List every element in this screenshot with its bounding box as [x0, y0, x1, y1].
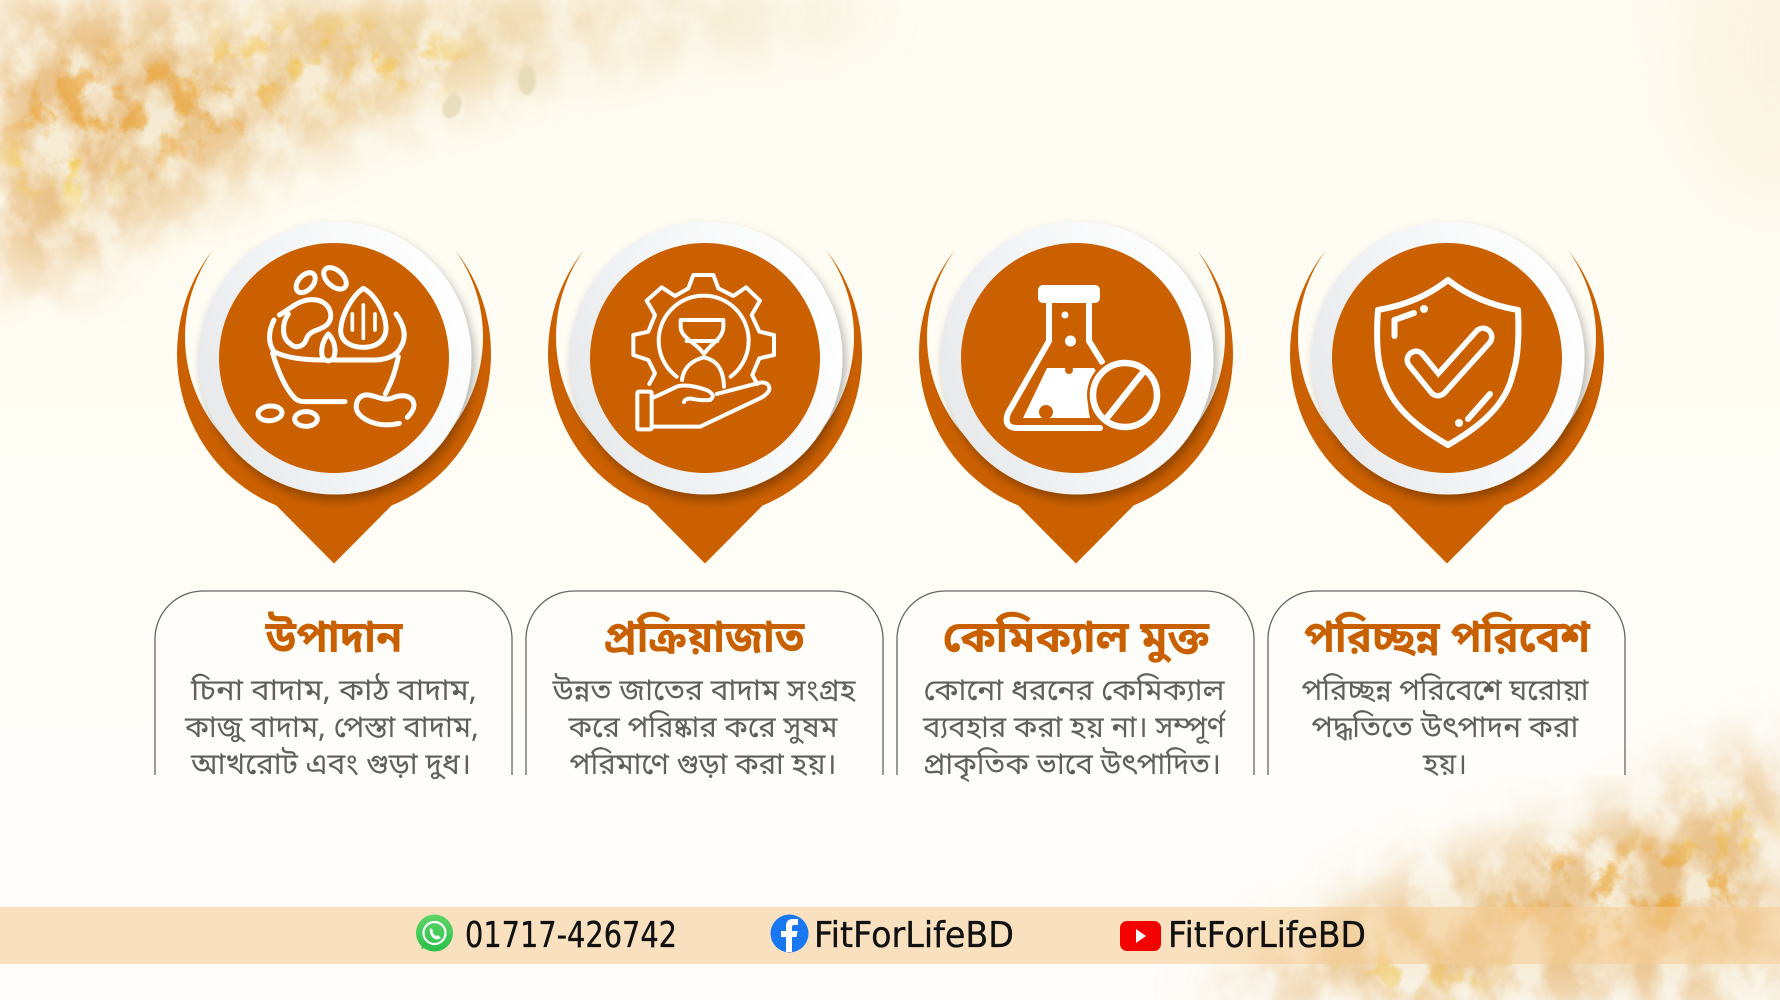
text: clean environment: পদ্ধতিতে উৎপাদন করা	[1312, 709, 1579, 750]
heading: processing: প্রক্রিয়াজাত	[604, 611, 806, 670]
icon: facebook	[770, 914, 808, 952]
panel: clean environment	[1268, 591, 1625, 787]
heading: chemical free: কেমিক্যাল মুক্ত	[942, 611, 1210, 670]
heading: clean environment: পরিচ্ছন্ন পরিবেশ	[1304, 612, 1591, 670]
heading: ingredients: উপাদান	[265, 611, 403, 670]
text: chemical free: ব্যবহার করা হয় না। সম্পূর্ণ	[922, 708, 1226, 750]
text: clean environment: হয়।	[1422, 747, 1467, 787]
icon: shield with check	[1377, 280, 1518, 445]
icon: flask and pill	[1007, 285, 1163, 433]
pin 3: chemical free	[919, 222, 1233, 564]
pin 1: ingredients	[177, 222, 491, 564]
text: chemical free: প্রাকৃতিক ভাবে উৎপাদিত।	[923, 746, 1221, 787]
icon: whatsapp	[416, 914, 453, 952]
icon: gear, hourglass and hand	[633, 275, 774, 429]
text: clean environment	[1302, 672, 1589, 787]
text: youtube handle: FitForLifeBD	[1168, 915, 1366, 956]
pin 4: clean environment	[1290, 222, 1604, 564]
text: ingredients: আখরোট এবং গুড়া দুধ।	[190, 746, 471, 787]
text: facebook handle: FitForLifeBD	[814, 915, 1014, 956]
text: processing	[552, 672, 856, 787]
text: chemical free	[922, 672, 1226, 787]
text: phone number: 01717-426742	[465, 915, 677, 956]
contact band	[0, 907, 1780, 964]
icon: youtube	[1120, 921, 1161, 951]
text: ingredients	[184, 671, 479, 787]
text: processing: পরিমাণে গুড়া করা হয়।	[570, 746, 836, 787]
panel: ingredients	[155, 591, 512, 787]
icon: bowl of nuts	[257, 263, 414, 426]
text: processing: করে পরিষ্কার করে সুষম	[568, 709, 838, 750]
panel: processing	[526, 591, 883, 787]
text: ingredients: কাজু বাদাম, পেস্তা বাদাম,	[184, 710, 479, 750]
text: clean environment: পরিচ্ছন্ন পরিবেশে ঘরোয়া	[1302, 672, 1589, 713]
text: ingredients: চিনা বাদাম, কাঠ বাদাম,	[190, 671, 477, 713]
panel: chemical free	[897, 591, 1254, 787]
text: processing: উন্নত জাতের বাদাম সংগ্রহ	[552, 672, 856, 713]
pin 2: processing	[548, 222, 862, 564]
text: chemical free: কোনো ধরনের কেমিক্যাল	[924, 672, 1226, 713]
